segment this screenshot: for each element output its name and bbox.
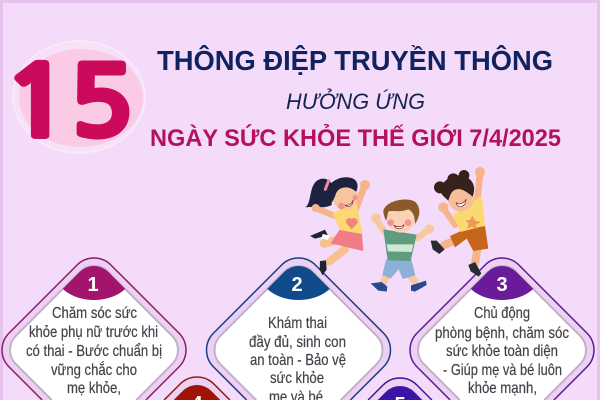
- message 1 text: có thai - Bước chuẩn bị: [26, 342, 162, 360]
- panel: message 2: [207, 248, 390, 400]
- message 2 text: Khám thai: [268, 315, 327, 332]
- panel: message 1: [2, 248, 186, 400]
- message 3 text: [435, 305, 569, 397]
- badge 3: [470, 266, 534, 300]
- big number 15 with pink ellipse: [2, 41, 145, 153]
- badge 4: [174, 385, 220, 400]
- subtitle: HƯỞNG ỨNG: [286, 88, 425, 114]
- message 2 text: [249, 315, 346, 400]
- message 3 text: sức khỏe toàn diện: [446, 343, 558, 360]
- badge 3: 3: [496, 274, 508, 296]
- message 2 text: an toàn - Bảo vệ: [250, 352, 346, 369]
- event heading: NGÀY SỨC KHỎE THẾ GIỚI 7/4/2025: [150, 123, 561, 152]
- message 2 text: sức khỏe: [270, 370, 324, 387]
- message 1 text: [26, 305, 162, 397]
- message 2 text: đầy đủ, sinh con: [249, 334, 346, 351]
- message 3 text: phòng bệnh, chăm sóc: [435, 325, 569, 342]
- big number 15 with pink ellipse: 5: [69, 55, 134, 151]
- badge 1: 1: [87, 274, 99, 296]
- panel: message 4: [164, 377, 230, 400]
- message 1 text: mẹ khỏe,: [67, 380, 121, 397]
- message 1 text: khỏe phụ nữ trước khi: [29, 324, 158, 341]
- illustration: boy jumping: [371, 200, 434, 292]
- panel: message 3: [410, 248, 594, 400]
- badge 2: [267, 266, 330, 300]
- illustration: girl jumping: [305, 177, 370, 275]
- message 3 text: - Giúp mẹ và bé luôn: [443, 362, 562, 379]
- message 1 text: Chăm sóc sức: [52, 305, 137, 322]
- message 1 text: vững chắc cho: [51, 360, 137, 379]
- panel: message 5: [368, 378, 432, 400]
- big number 15 with pink ellipse: 1: [2, 55, 73, 150]
- message 3 text: khỏe mạnh,: [468, 380, 537, 397]
- illustration: child with star shirt: [431, 167, 488, 277]
- badge 1: [62, 266, 126, 300]
- badge 5: [378, 386, 422, 400]
- badge 2: 2: [291, 274, 303, 296]
- title: THÔNG ĐIỆP TRUYỀN THÔNG: [157, 44, 553, 76]
- message 3 text: Chủ động: [474, 305, 530, 322]
